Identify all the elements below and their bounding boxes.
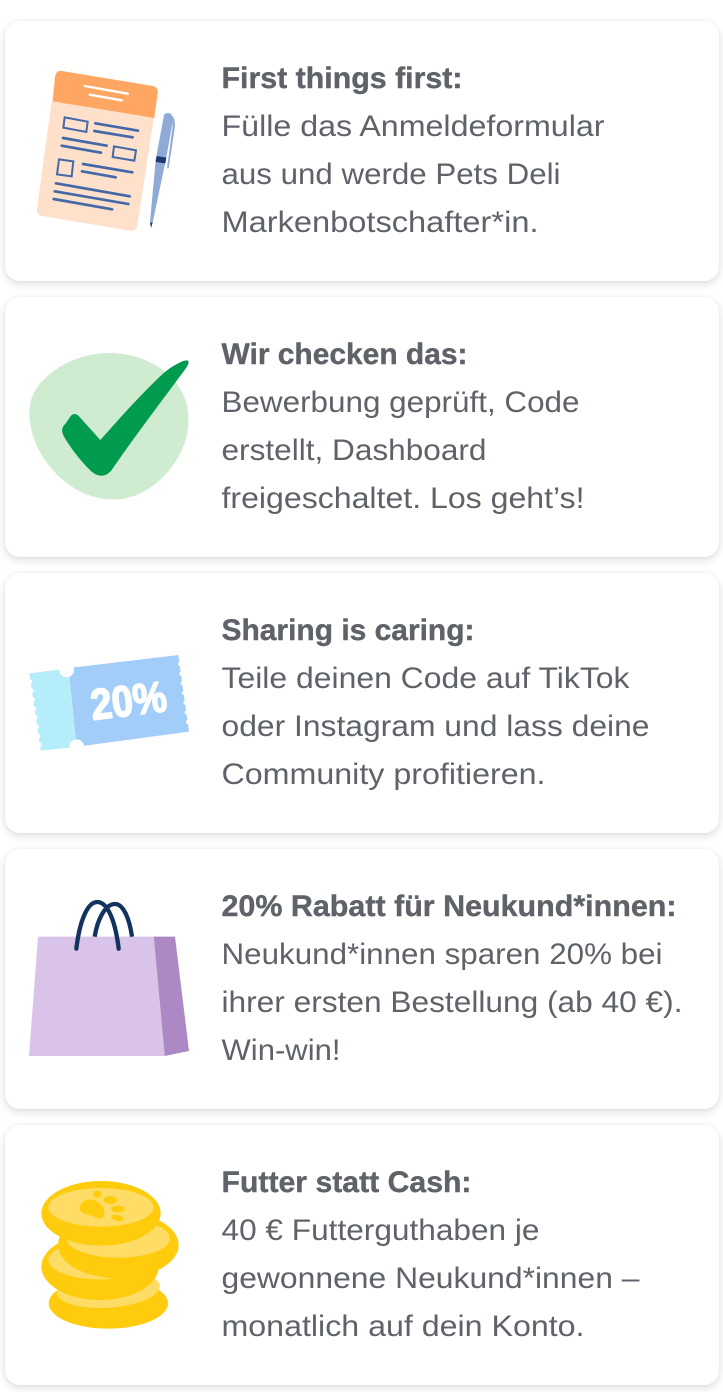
body text: oder Instagram und lass deine bbox=[222, 710, 650, 743]
body text: Bewerbung geprüft, Code bbox=[222, 386, 580, 419]
body text: ihrer ersten Bestellung (ab 40 €). bbox=[222, 986, 682, 1019]
body text: aus und werde Pets Deli bbox=[222, 158, 560, 191]
icon: 20 percent coupon bbox=[29, 655, 189, 751]
heading: Futter statt Cash: bbox=[222, 1166, 472, 1199]
icon: form and pen bbox=[36, 70, 175, 231]
heading: 20% Rabatt für Neukund*innen: bbox=[222, 890, 677, 923]
text block: step 3 bbox=[222, 614, 650, 791]
body text: freigeschaltet. Los geht’s! bbox=[222, 482, 584, 515]
heading: Sharing is caring: bbox=[222, 614, 474, 647]
icon: green check mark bbox=[29, 353, 189, 500]
icon: stack of coins bbox=[41, 1181, 179, 1329]
body text bbox=[222, 386, 584, 515]
body text bbox=[222, 938, 682, 1067]
body text: 40 € Futterguthaben je bbox=[222, 1214, 540, 1247]
body text: monatlich auf dein Konto. bbox=[222, 1310, 584, 1343]
heading: Wir checken das: bbox=[222, 338, 468, 371]
icon: shopping bag bbox=[29, 900, 189, 1056]
panel: step 2 check bbox=[5, 297, 719, 557]
body text: gewonnene Neukund*innen – bbox=[222, 1262, 640, 1295]
body text bbox=[222, 110, 605, 239]
text block: step 2 bbox=[221, 338, 584, 515]
text block: step 5 bbox=[222, 1166, 640, 1343]
body text: erstellt, Dashboard bbox=[222, 434, 486, 467]
panel: step 5 food credit bbox=[5, 1125, 719, 1385]
body text: Community profitieren. bbox=[222, 758, 546, 791]
body text bbox=[222, 1214, 640, 1343]
heading: First things first: bbox=[222, 62, 462, 95]
text block: step 1 bbox=[222, 62, 605, 239]
panel: step 4 discount bbox=[5, 849, 719, 1109]
text block: step 4 bbox=[222, 890, 682, 1067]
body text: Markenbotschafter*in. bbox=[222, 206, 538, 239]
panel: step 1 form bbox=[5, 21, 719, 281]
body text: Win-win! bbox=[222, 1034, 340, 1067]
panel: step 3 sharing bbox=[5, 573, 719, 833]
body text: Teile deinen Code auf TikTok bbox=[222, 662, 631, 695]
body text bbox=[222, 662, 650, 791]
icon: 20 percent coupon: 20% bbox=[88, 673, 169, 730]
body text: Neukund*innen sparen 20% bei bbox=[222, 938, 662, 971]
body text: Fülle das Anmeldeformular bbox=[222, 110, 605, 143]
